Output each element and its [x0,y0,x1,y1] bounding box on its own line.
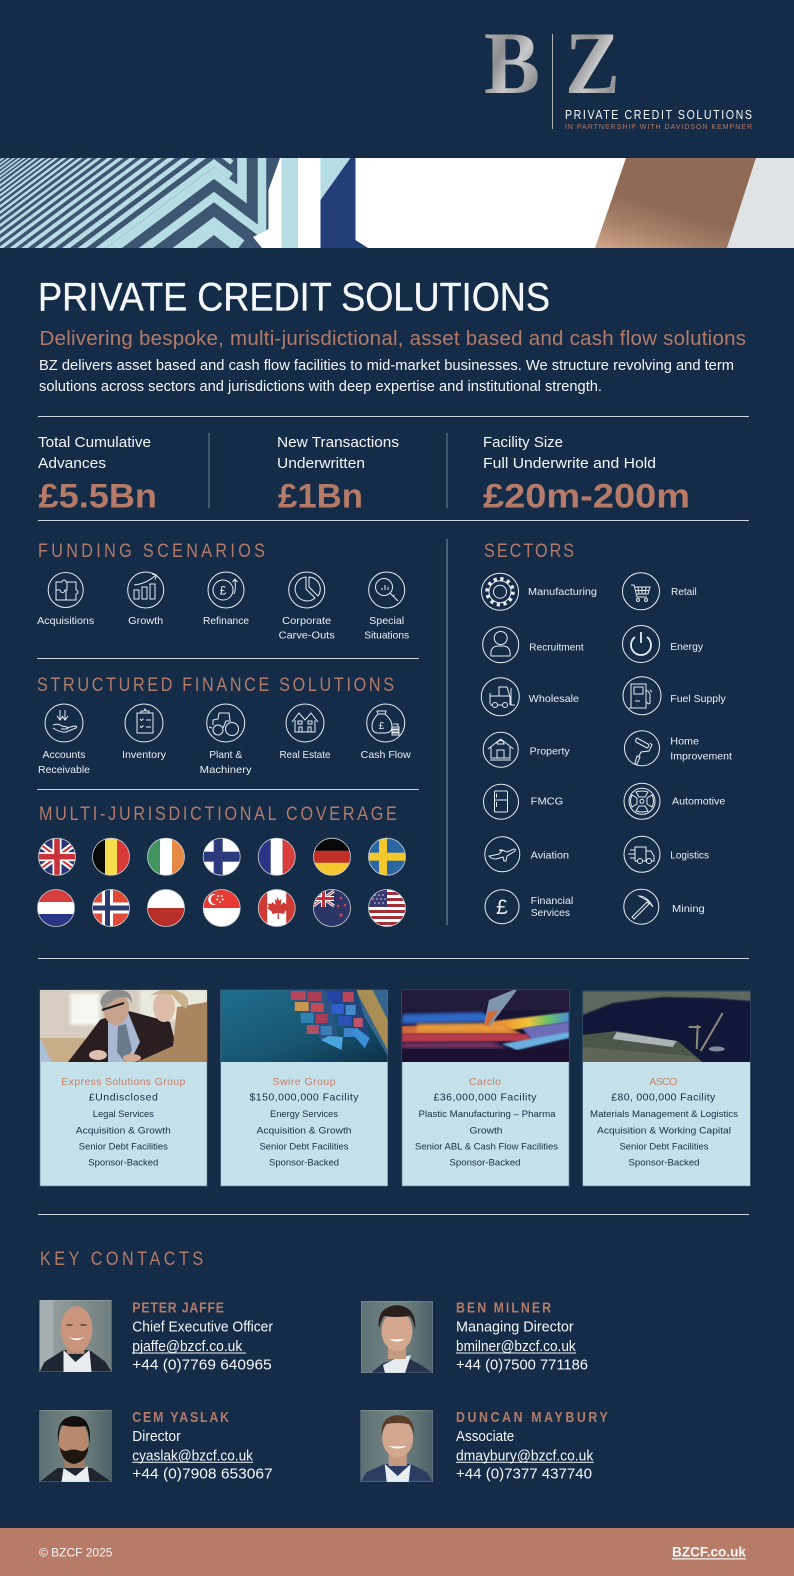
contact: Peter Jaffe [39,1300,273,1374]
photo: container ships [220,990,388,1062]
logo: BZ Private Credit Solutions: Z [565,15,620,113]
sector: wholesale: Wholesale [529,693,579,705]
sector: aviation [485,837,569,872]
sector: automotive [624,783,725,819]
contact: Ben Milner: Managing Director [456,1319,574,1336]
item: accounts receivable: Receivable [38,764,90,776]
case study card: Swire Group: $150,000,000 Facility [250,1092,359,1104]
case study card: ASCO [583,991,751,1186]
logo: BZ Private Credit Solutions [484,15,752,131]
flag: Finland [203,838,241,876]
portrait: Cem Yaslak [40,1410,112,1482]
item: plant and machinery: Machinery [200,764,253,776]
flag: Sweden [368,838,406,876]
sector: fuel supply [623,677,726,715]
item: acquisitions [37,572,94,627]
case study card: Swire Group: Senior Debt Facilities [260,1142,349,1153]
heading: funding scenarios: FUNDING SCENARIOS [38,540,265,561]
case study card: Express Solutions Group: Acquisition & Growth [76,1126,171,1137]
heading: structured finance solutions: STRUCTURED FINANCE SOLUTIONS [37,674,394,695]
sector: recruitment: Recruitment [529,642,584,654]
item: inventory: Inventory [122,749,167,761]
case study card: Express Solutions Group: Legal Services [93,1109,154,1120]
stat: new transactions underwritten: £1Bn [278,478,363,516]
case study card: Express Solutions Group: Sponsor-Backed [88,1158,158,1169]
sector: logistics: Logistics [670,849,709,861]
heading: sectors: SECTORS [484,540,574,561]
item: cash flow [361,704,411,761]
flag: Netherlands [37,889,75,927]
case study card: Swire Group: Acquisition & Growth [256,1126,352,1137]
flag: Singapore [203,889,241,927]
sector: mining: Mining [672,903,705,915]
flag: United Kingdom [38,838,76,876]
item: refinance [203,572,249,627]
sector: home improvement: Home [670,736,699,748]
contact: Cem Yaslak: +44 (0)7908 653067 [132,1466,273,1483]
flag: New Zealand [313,889,351,927]
stat: total cumulative advances: £5.5Bn [38,478,157,516]
contact: Cem Yaslak [39,1409,273,1483]
sector: manufacturing [482,573,597,610]
case study card: Carclo [402,990,569,1186]
contact: Cem Yaslak: Director [132,1428,181,1445]
contact: Ben Milner: +44 (0)7500 771186 [456,1357,588,1374]
case study card: Swire Group [221,990,388,1186]
case study card: Carclo: Carclo [469,1076,501,1088]
item: real estate: Real Estate [280,749,331,761]
sector: financial services: Financial [531,895,573,907]
contact: Peter Jaffe: pjaffe@bzcf.co.uk [132,1338,243,1355]
item: accounts receivable [38,704,90,776]
item: real estate [280,704,331,761]
stat: new transactions underwritten: Underwritten [277,455,365,472]
flag: Poland [147,889,185,927]
logo: BZ Private Credit Solutions: IN PARTNERSHIP WITH DAVIDSON KEMPNER [565,124,752,131]
flag: Germany [313,838,351,876]
decorative banner with chevrons and copper band [0,158,794,248]
case study card: ASCO: Materials Management & Logistics [590,1109,738,1120]
case study card: Express Solutions Group [40,989,207,1186]
item: corporate carve-outs: Corporate [282,615,331,627]
flag: Norway [92,889,130,927]
sector: home improvement [624,731,732,766]
panel: sectors [481,540,732,924]
contact: Duncan Maybury: Associate [456,1428,514,1445]
photo: laboratory pipette and well plate [402,990,569,1062]
item: cash flow: £ [379,721,385,732]
logo: BZ Private Credit Solutions: PRIVATE CREDIT SOLUTIONS [565,108,752,122]
stat: total cumulative advances: Total Cumulative [38,434,151,451]
case study card: ASCO: ASCO [649,1076,677,1088]
sector: recruitment [483,627,584,663]
contact: Peter Jaffe: Chief Executive Officer [132,1319,273,1336]
case study card: Swire Group: Swire Group [272,1076,336,1088]
sector: FMCG: FMCG [531,796,563,808]
intro paragraph: solutions across sectors and jurisdictions with deep expertise and institutional strength. [39,379,602,395]
stat: facility size: Full Underwrite and Hold [483,455,656,472]
contact: Peter Jaffe: PETER JAFFE [132,1300,224,1316]
item: corporate carve-outs [279,572,335,642]
case study card: Carclo: Senior ABL & Cash Flow Facilities [415,1142,558,1153]
sector: manufacturing: Manufacturing [528,586,597,598]
item: plant and machinery: Plant & [209,749,242,761]
item: special situations: Situations [364,630,409,642]
case study card: ASCO: Acquisition & Working Capital [597,1126,731,1137]
flag: Belgium [92,838,130,876]
subtitle: Delivering bespoke, multi-jurisdictional, asset based and cash flow solutions [40,327,746,350]
item: growth: Growth [128,615,163,627]
sector: financial services: £ [496,896,508,919]
contact: Duncan Maybury [360,1409,608,1483]
stat: total cumulative advances [38,434,157,516]
contact: Ben Milner: BEN MILNER [456,1300,551,1316]
sector: logistics [624,836,709,872]
stat: facility size: £20m-200m [483,478,690,516]
copyright: © BZCF 2025 [39,1548,112,1560]
contact: Duncan Maybury: dmaybury@bzcf.co.uk [456,1447,594,1464]
case study card: Express Solutions Group: Senior Debt Facilities [79,1142,168,1153]
item: accounts receivable: Accounts [42,749,86,761]
item: special situations [364,572,409,642]
stat: facility size: Facility Size [483,434,563,451]
sector: property [483,732,570,767]
contact: Ben Milner: bmilner@bzcf.co.uk [456,1338,576,1355]
sector: automotive: Automotive [672,796,725,808]
photo: business meeting [40,990,207,1062]
item: acquisitions: Acquisitions [37,615,94,627]
case study card: Express Solutions Group: Express Solutions Group [61,1076,185,1088]
flag: Ireland [147,838,185,876]
heading: multi-jurisdictional coverage: MULTI-JURISDICTIONAL COVERAGE [39,803,397,824]
case study card: ASCO: Sponsor-Backed [628,1158,700,1169]
stat: new transactions underwritten: New Transactions [277,434,399,451]
item: refinance: Refinance [203,615,249,627]
item: special situations: Special [369,615,404,627]
panel: funding scenarios [37,540,409,642]
sector: energy: Energy [670,641,704,653]
case study card: ASCO: Senior Debt Facilities [620,1142,709,1153]
stat: facility size [483,434,690,516]
item: plant and machinery [200,704,253,776]
contact: Peter Jaffe: +44 (0)7769 640965 [132,1357,272,1374]
portrait: Peter Jaffe [40,1300,112,1372]
photo: aerial view of harbour [582,991,750,1062]
website link: BZCF.co.uk [672,1544,746,1560]
portrait: Duncan Maybury [360,1410,433,1482]
portrait: Ben Milner [361,1301,433,1373]
case study card: Swire Group: Energy Services [270,1109,338,1120]
case study card: ASCO: £80, 000,000 Facility [611,1092,716,1104]
sector: FMCG [484,784,563,819]
contact: Cem Yaslak: CEM YASLAK [132,1409,229,1425]
flag: Canada [258,889,296,927]
sector: mining [624,889,705,924]
sector: wholesale [481,678,579,716]
item: cash flow: Cash Flow [361,749,411,761]
case study card: Express Solutions Group: £Undisclosed [89,1092,158,1104]
stat: new transactions underwritten [277,434,399,516]
case study card: Swire Group: Sponsor-Backed [269,1158,339,1169]
contact: Duncan Maybury: DUNCAN MAYBURY [456,1409,608,1425]
stat: total cumulative advances: Advances [38,455,106,472]
flag: United States [368,889,406,927]
case study card: Carclo: Sponsor-Backed [450,1158,520,1169]
item: growth [128,572,164,627]
sector: financial services [485,890,573,924]
sector: retail: Retail [671,586,697,598]
item: corporate carve-outs: Carve-Outs [279,630,335,642]
sector: energy [622,626,704,662]
sector: property: Property [530,745,570,757]
intro paragraph: BZ delivers asset based and cash flow facilities to mid-market businesses. We structure revolving and term [39,358,734,374]
sector: home improvement: Improvement [670,751,732,763]
contact: Ben Milner [360,1300,588,1374]
panel: multi-jurisdictional coverage [37,803,406,927]
panel: structured finance solutions [37,674,411,776]
item: refinance: £ [220,584,227,598]
contact: Cem Yaslak: cyaslak@bzcf.co.uk [132,1447,253,1464]
intro paragraph [39,358,734,395]
case study card: Carclo: Growth [470,1126,502,1137]
contact: Duncan Maybury: +44 (0)7377 437740 [456,1466,592,1483]
title: PRIVATE CREDIT SOLUTIONS [38,276,550,320]
flag: France [258,838,296,876]
sector: aviation: Aviation [531,849,569,861]
footer bar [0,1528,794,1576]
heading: key contacts: KEY CONTACTS [40,1248,203,1269]
sector: retail [622,573,697,610]
case study card: Carclo: Plastic Manufacturing – Pharma [418,1109,556,1120]
item: inventory [122,704,167,761]
case study card: Carclo: £36,000,000 Facility [434,1092,537,1104]
logo: BZ Private Credit Solutions: B [484,15,540,113]
sector: financial services: Services [531,907,570,919]
sector: fuel supply: Fuel Supply [670,693,726,705]
